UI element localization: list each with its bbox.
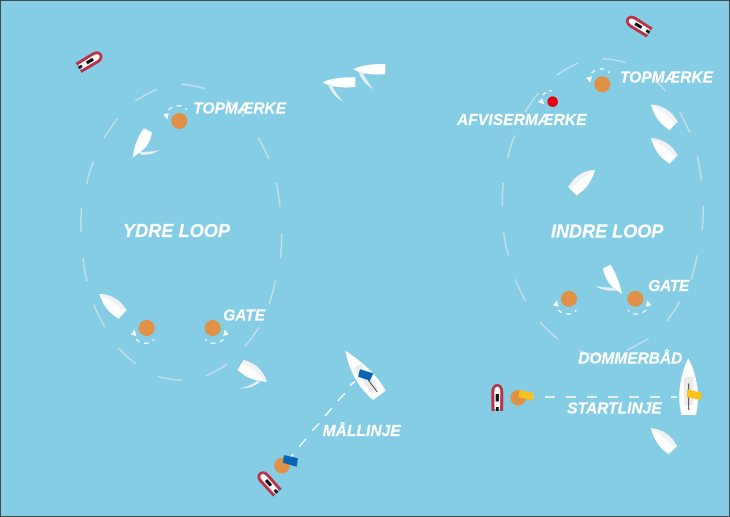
- sailboat: top centre right: [353, 64, 385, 89]
- label: outer top mark: TOPMÆRKE: [193, 100, 287, 117]
- label: outer gate: GATE: [223, 308, 266, 325]
- start line: [533, 396, 677, 398]
- finish boat with blue flag: [345, 351, 386, 400]
- sailboat: inner loop right lower: [646, 133, 679, 165]
- mark: outer gate left with rounding arrow: [131, 320, 155, 343]
- rescue boat: top right: [624, 13, 653, 38]
- mark: inner gate right with rounding arrow: [627, 291, 651, 314]
- sailboat: top centre left: [323, 77, 355, 102]
- course: inner loop dashed path: [502, 59, 703, 356]
- heading: outer loop: YDRE LOOP: [123, 221, 231, 241]
- sailboat: below start line: [646, 423, 678, 455]
- label: offset mark: AFVISERMÆRKE: [456, 112, 587, 129]
- finish line: [291, 381, 355, 457]
- sailboat: outer loop top: [133, 128, 160, 158]
- sailboat: inner loop right upper: [646, 99, 679, 131]
- label: inner gate: GATE: [648, 278, 690, 295]
- rescue boat: start line: [491, 384, 503, 411]
- heading: inner loop: INDRE LOOP: [551, 222, 664, 242]
- label: inner top mark: TOPMÆRKE: [620, 70, 714, 87]
- sailboat: outer loop bottom right: [237, 358, 271, 388]
- sailboat: outer loop left gate: [95, 288, 128, 320]
- label: start line: STARTLINJE: [567, 400, 662, 417]
- sailboat: inner loop gate: [595, 264, 622, 294]
- committee boat with yellow flag: [679, 358, 702, 415]
- label: finish line: MÅLLINJE: [323, 423, 401, 440]
- mark: red offset mark with rounding arrow: [538, 91, 558, 107]
- finish mark with blue flag: [274, 455, 298, 474]
- rescue boat: finish line: [255, 469, 282, 497]
- start mark with yellow flag: [510, 390, 534, 406]
- mark: outer gate right with rounding arrow: [205, 320, 229, 343]
- mark: outer top mark with rounding arrow: [163, 106, 187, 129]
- sailboat: inner loop centre: [567, 164, 600, 196]
- rescue boat: top left: [75, 49, 105, 73]
- mark: inner top mark with rounding arrow: [586, 69, 610, 92]
- course: outer loop dashed path: [81, 84, 282, 380]
- label: committee boat: DOMMERBÅD: [578, 350, 682, 367]
- mark: inner gate left with rounding arrow: [553, 291, 577, 314]
